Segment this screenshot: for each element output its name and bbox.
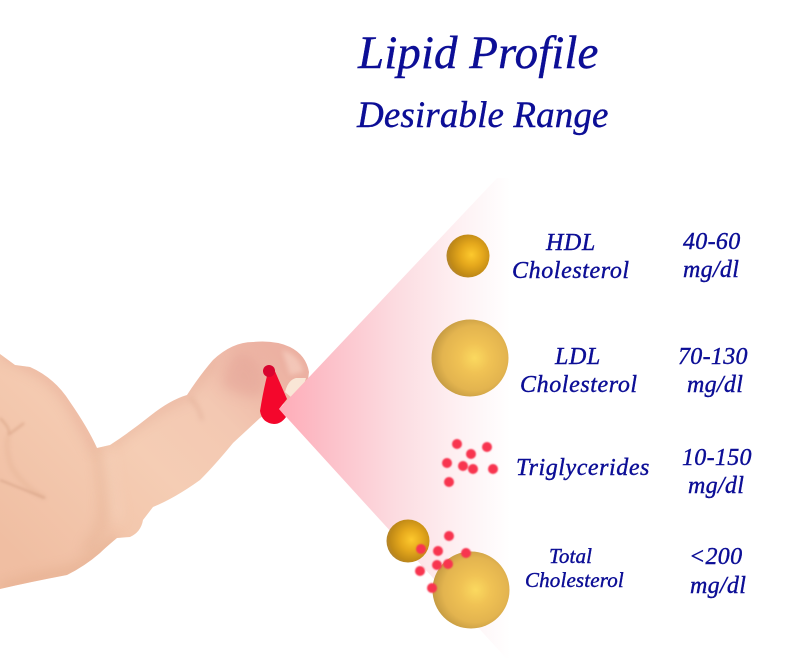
- fingernail: [285, 378, 306, 398]
- value: LDL range: 70-130: [678, 344, 748, 370]
- value: HDL range: 40-60: [683, 229, 740, 255]
- label: HDL: Cholesterol: [512, 258, 630, 284]
- blood drop: [260, 365, 287, 424]
- label: LDL: LDL: [554, 344, 601, 370]
- hand with raised finger: [0, 342, 309, 589]
- title: [356, 27, 609, 136]
- subtitle: Desirable Range: [356, 95, 609, 136]
- row: triglycerides: [442, 439, 752, 499]
- row: total cholesterol: [386, 520, 746, 628]
- value: HDL range: mg/dl: [683, 257, 739, 283]
- title: Lipid Profile: [357, 27, 599, 79]
- row: HDL cholesterol: [446, 229, 740, 284]
- icon: large sphere: [432, 552, 510, 628]
- row: LDL cholesterol: [432, 320, 748, 398]
- value: LDL range: mg/dl: [687, 372, 743, 398]
- icon: triglyceride dots: [442, 439, 498, 487]
- icon: LDL sphere: [432, 320, 508, 396]
- label: LDL: Cholesterol: [520, 372, 638, 398]
- label: total cholesterol: Total: [549, 544, 592, 568]
- label: triglycerides: Triglycerides: [516, 455, 650, 481]
- icon: small sphere: [386, 520, 430, 562]
- value: triglycerides range: mg/dl: [688, 473, 744, 499]
- value: triglycerides range: 10-150: [682, 445, 752, 471]
- value: total range: <200: [689, 544, 742, 570]
- light cone: [279, 178, 510, 660]
- label: HDL: HDL: [545, 230, 596, 256]
- icon: HDL sphere: [446, 234, 490, 278]
- label: total cholesterol: Cholesterol: [525, 568, 624, 592]
- value: total range: mg/dl: [690, 573, 746, 599]
- icon: scattered dots: [415, 531, 471, 593]
